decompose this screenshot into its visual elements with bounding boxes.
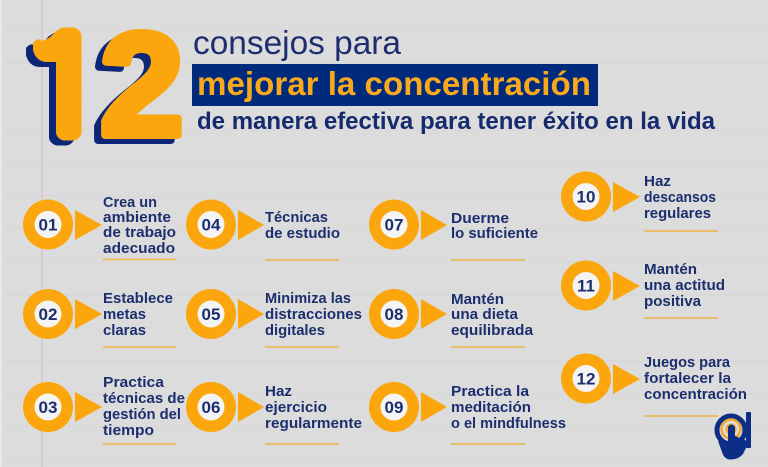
icon: logo touch hand [717,412,751,460]
tip 08: Mantén [451,292,504,308]
tip 07 [369,200,538,260]
tip 10: regulares [644,206,711,222]
tip 08: equilibrada [451,323,534,339]
tip 11: positiva [644,294,702,310]
tip 06: ejercicio [265,400,327,416]
tip 02: 02 [39,305,57,324]
tip 09: meditación [451,400,531,416]
tip 06: regularmente [265,416,362,432]
tip 04: de estudio [265,226,340,242]
tip 10: 10 [577,188,595,206]
big number 12: 1 [22,4,104,169]
tip 11 [561,260,725,318]
tip 03: tiempo [103,423,154,439]
big number 12: 2 [100,4,184,167]
tip 03: Practica [103,375,165,391]
tip 07: Duerme [451,211,509,227]
tip 10: descansos [644,190,716,206]
tip 03 [23,375,185,444]
big number 12: 1 [15,9,97,174]
tip 10: Haz [644,174,671,190]
tip 01: adecuado [103,241,175,257]
big number 12: 2 [93,9,177,172]
tip 08: 08 [385,305,403,324]
tip 05: 05 [202,305,220,324]
tip 06 [186,382,362,444]
tip 12 [561,354,747,416]
tip 07: 07 [385,216,403,234]
tip 06: Haz [265,384,292,400]
tip 10 [561,172,718,231]
tip 03: gestión del [103,407,181,423]
tip 01: ambiente [103,210,171,226]
tip 09 [369,382,566,444]
tip 12: fortalecer la [644,371,732,387]
tip 05: Minimiza las [265,291,351,307]
tip 03: técnicas de [103,391,185,407]
tip 12: 12 [577,370,595,388]
big number 12 [26,28,182,146]
tip 11: Mantén [644,262,697,278]
tip 11: una actitud [644,278,725,294]
tip 02 [23,289,176,347]
tip 02: metas [103,307,146,323]
tip 11: 11 [577,276,595,296]
tip 02: Establece [103,291,173,307]
tip 01 [23,195,176,260]
tip 08: una dieta [451,307,519,323]
tip 05: distracciones [265,307,362,323]
tip 12: Juegos para [644,355,731,371]
tip 02: claras [103,323,146,339]
tip 01: 01 [39,216,57,234]
tip 09: 09 [385,398,403,417]
tip 01: Crea un [103,195,157,211]
subtitle: de manera efectiva para tener éxito en la vida [197,108,716,135]
tip 05: digitales [265,323,325,339]
tip 04: Técnicas [265,210,328,226]
tip 03: 03 [39,398,57,417]
tip 06: 06 [202,398,220,417]
tip 05 [186,289,362,347]
tip 12: concentración [644,387,747,403]
tip 01: de trabajo [103,225,176,241]
tip 08 [369,289,534,347]
title highlight: mejorar la concentración [197,65,591,102]
tip 09: Practica la [451,384,530,400]
tip 04 [186,200,340,260]
tip 04: 04 [202,216,221,234]
tip 09: o el mindfulness [451,416,566,432]
tip 07: lo suficiente [451,226,538,242]
title: consejos para: consejos para [193,24,402,61]
